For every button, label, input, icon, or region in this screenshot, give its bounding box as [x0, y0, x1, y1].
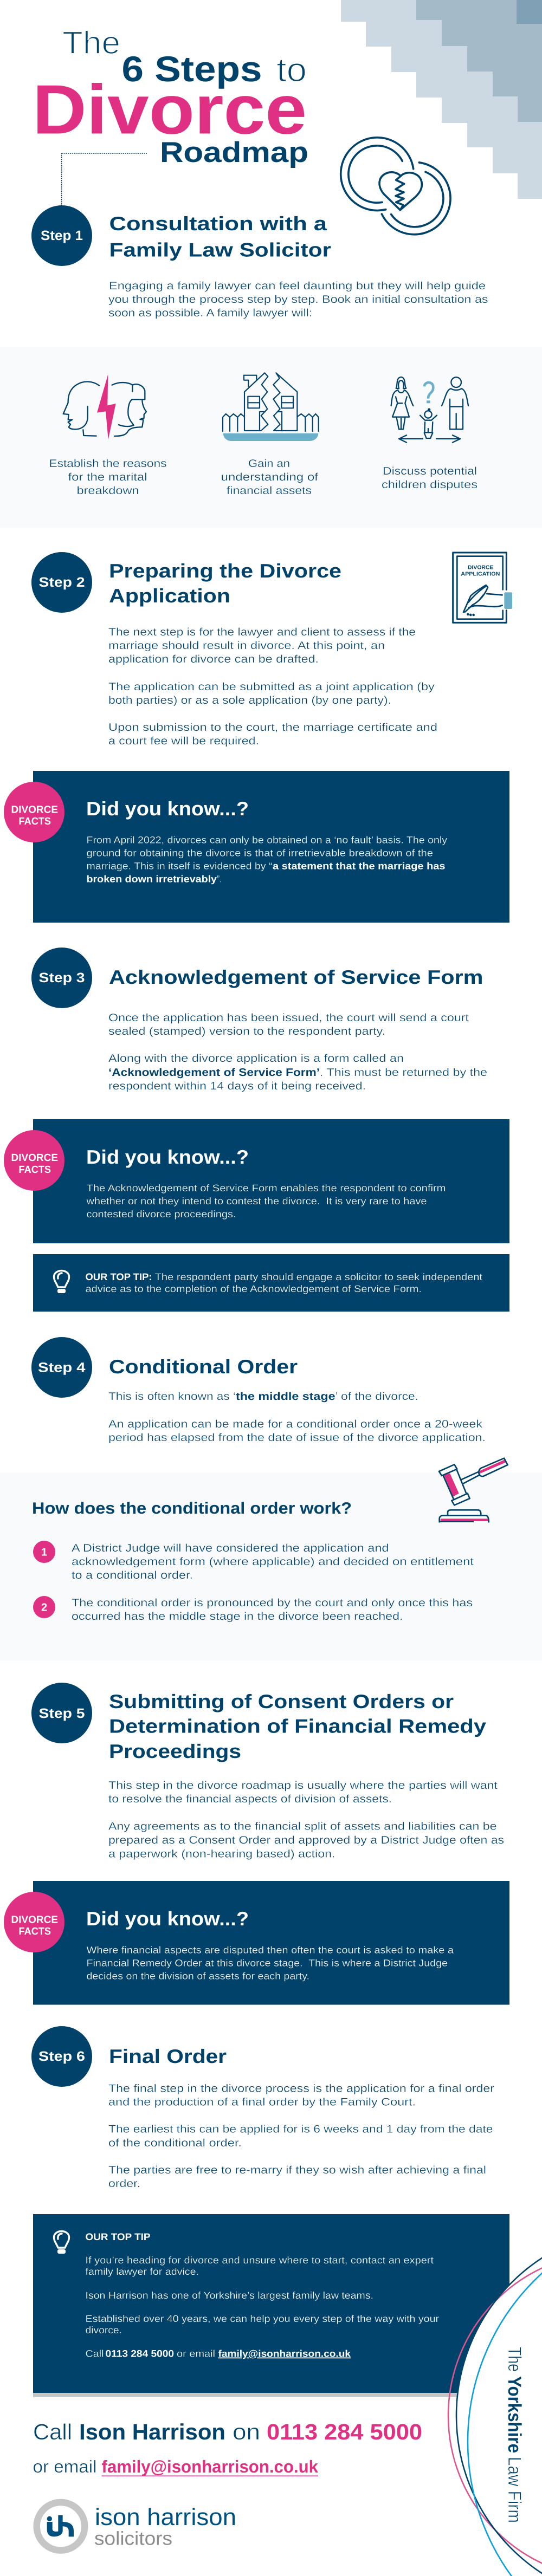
numbered item 2: The conditional order is pronounced by the court and only once this has: [72, 1597, 473, 1609]
step 1 text: soon as possible. A family lawyer will:: [108, 307, 312, 319]
icon: light bulb: [54, 1271, 69, 1293]
step 4 badge: [31, 1337, 92, 1398]
step 1 heading: Consultation with a: [109, 212, 327, 235]
tip text: [86, 2255, 439, 2359]
step 3 badge: Step 3: [39, 970, 85, 985]
badge: divorce facts: FACTS: [18, 816, 51, 827]
step 6 heading: Final Order: [109, 2045, 227, 2067]
step 1 heading: [109, 212, 331, 261]
caption: marital breakdown: breakdown: [77, 485, 139, 497]
step 6 badge: [31, 2026, 92, 2087]
fact text: The Acknowledgement of Service Form enables the respondent to confirm: [87, 1183, 446, 1193]
step 4 text: period has elapsed from the date of issue of the divorce application.: [108, 1432, 486, 1444]
step 2 text: [108, 626, 437, 747]
badge: divorce facts: DIVORCE: [11, 1915, 58, 1925]
step 4 text: An application can be made for a conditional order once a 20-week: [108, 1418, 483, 1430]
fact text: a statement that the marriage has: [273, 860, 446, 871]
step 5 heading: [109, 1690, 486, 1762]
icon: light bulb: [54, 2231, 69, 2254]
caption: marital breakdown: for the marital: [68, 471, 147, 483]
badge: divorce facts: [4, 1892, 64, 1952]
tip text: family@isonharrison.co.uk: [218, 2348, 351, 2359]
step 2 badge: Step 2: [39, 575, 85, 590]
call to action: phone: 0113 284 5000: [267, 2419, 422, 2444]
logo: ison harrison solicitors: [37, 2502, 236, 2551]
badge: divorce facts: DIVORCE: [11, 804, 58, 816]
dotted connector line: [62, 153, 147, 206]
icon: two heads with lightning: [63, 374, 146, 440]
caption: financial assets: financial assets: [227, 485, 312, 497]
step 3 text: [108, 1012, 487, 1092]
step 5 heading: Proceedings: [109, 1740, 241, 1762]
step 1 heading: Family Law Solicitor: [109, 238, 331, 261]
logo: ison harrison solicitors: solicitors: [94, 2528, 172, 2549]
logo: ison harrison solicitors: ison harrison: [95, 2504, 236, 2530]
icon: divorce application document: [453, 553, 512, 622]
step 3 text: sealed (stamped) version to the respondent party.: [108, 1026, 385, 1037]
caption: marital breakdown: Establish the reasons: [49, 458, 167, 470]
step 4 text: the middle stage: [236, 1391, 335, 1403]
step 1 badge: [31, 205, 92, 266]
step 3 heading: Acknowledgement of Service Form: [109, 966, 483, 988]
heading: did you know: Did you know...?: [86, 1146, 249, 1168]
step 2 text: both parties) or as a sole application (by one party).: [108, 695, 391, 706]
badge: divorce facts: [4, 1130, 64, 1191]
step 4 badge: Step 4: [38, 1360, 86, 1375]
call to action: email: family@isonharrison.co.uk: [102, 2457, 318, 2476]
fact text: [86, 1183, 446, 1219]
fact text: broken down irretrievably: [87, 873, 217, 884]
numbered item 1: [33, 1541, 474, 1581]
step 6 text: [108, 2082, 494, 2190]
step 3 text: Once the application has been issued, the court will send a court: [108, 1012, 469, 1024]
tip text: If you’re heading for divorce and unsure where to start, contact an expert: [86, 2255, 434, 2266]
fact text: ground for obtaining the divorce is that of irretrievable breakdown of the: [87, 847, 433, 858]
tip text: OUR TOP TIP:: [86, 1271, 152, 1282]
badge: divorce facts: [4, 782, 64, 842]
vertical strapline: [504, 2347, 525, 2523]
numbered item 2: [33, 1596, 473, 1623]
step 5 heading: Determination of Financial Remedy: [109, 1715, 486, 1737]
tip text: Ison Harrison has one of Yorkshire’s largest family law teams.: [86, 2290, 373, 2301]
step 5 text: [108, 1780, 504, 1860]
step 5 text: Any agreements as to the financial split of assets and liabilities can be: [108, 1820, 496, 1832]
step 6 text: The earliest this can be applied for is 6 weeks and 1 day from the date: [108, 2124, 493, 2136]
panel: divorce facts 1: [4, 771, 509, 923]
step 2 heading: Application: [109, 585, 230, 607]
fact text: [87, 834, 447, 884]
step 6 text: of the conditional order.: [108, 2137, 242, 2149]
fact text: Financial Remedy Order at this divorce stage. This is where a District Judge: [87, 1958, 448, 1969]
title: [33, 25, 308, 168]
caption: financial assets: [221, 458, 319, 497]
icon: split house: [223, 373, 319, 441]
icon: broken heart and rings: [341, 138, 450, 235]
icon: parents and child: [391, 377, 468, 443]
step 2 heading: Preparing the Divorce: [109, 560, 341, 582]
title: 6 Steps: [121, 49, 262, 89]
fact text: Where financial aspects are disputed then often the court is asked to make a: [87, 1945, 454, 1956]
numbered item 1: to a conditional order.: [72, 1569, 193, 1581]
panel: divorce facts 3: [4, 1881, 509, 2004]
step 3 badge: [31, 948, 92, 1008]
badge: divorce facts: FACTS: [18, 1926, 51, 1937]
caption: children disputes: Discuss potential: [383, 465, 477, 477]
step 3 text: Along with the divorce application is a form called an: [108, 1053, 404, 1065]
caption: children disputes: children disputes: [382, 479, 478, 491]
caption: financial assets: understanding of: [221, 471, 319, 483]
step 2 text: a court fee will be required.: [108, 735, 259, 747]
step 4 heading: Conditional Order: [109, 1355, 298, 1378]
title: The: [62, 25, 120, 61]
vertical strapline: Yorkshire: [504, 2376, 525, 2453]
tip text: family lawyer for advice.: [86, 2266, 199, 2277]
numbered item 1: A District Judge will have considered the application and: [72, 1542, 389, 1554]
step 6 text: The parties are free to re-marry if they so wish after achieving a final: [108, 2164, 486, 2176]
call to action: phone: on: [233, 2419, 260, 2444]
step 6 text: The final step in the divorce process is the application for a final order: [108, 2082, 494, 2094]
icon: divorce application document: APPLICATION: [461, 571, 500, 577]
step 2 text: marriage should result in divorce. At this point, an: [108, 640, 385, 652]
icon: divorce application document: DIVORCE: [468, 564, 493, 570]
badge: divorce facts: DIVORCE: [11, 1152, 58, 1164]
fact text: marriage. This in itself is evidenced by “: [87, 860, 272, 871]
step 6 text: order.: [108, 2178, 140, 2190]
tip text: divorce.: [86, 2325, 122, 2335]
step 5 text: prepared as a Consent Order and approved by a District Judge often as: [108, 1834, 504, 1846]
call to action: phone: Ison Harrison: [79, 2419, 225, 2444]
call to action: phone: Call: [33, 2419, 72, 2444]
step 2 text: The next step is for the lawyer and client to assess if the: [108, 626, 416, 638]
decorative circle arcs: [448, 2214, 542, 2576]
tip text: or email: [177, 2348, 215, 2359]
tip text: The respondent party should engage a solicitor to seek independent: [155, 1271, 482, 1282]
tip text: Call: [86, 2348, 104, 2359]
tip text: 0113 284 5000: [105, 2348, 174, 2359]
step 4 text: This is often known as ‘: [108, 1391, 236, 1403]
fact text: ”.: [217, 873, 222, 884]
step 5 text: a paperwork (non-hearing based) action.: [108, 1848, 335, 1860]
heading: did you know: Did you know...?: [86, 1907, 249, 1930]
step 3 text: respondent within 14 days of it being received.: [108, 1080, 366, 1092]
step 2 text: application for divorce can be drafted.: [108, 653, 319, 665]
tip text: Established over 40 years, we can help you every step of the way with your: [86, 2313, 439, 2324]
heading: how does the conditional order work: How does the conditional order work?: [32, 1500, 352, 1517]
fact text: whether or not they intend to contest the divorce. It is very rare to have: [86, 1196, 427, 1206]
step 5 heading: Submitting of Consent Orders or: [109, 1690, 454, 1712]
fact text: contested divorce proceedings.: [87, 1209, 236, 1219]
call to action: phone: [33, 2419, 422, 2444]
badge: divorce facts: FACTS: [18, 1164, 51, 1176]
tip heading: OUR TOP TIP: [86, 2231, 151, 2242]
step 5 badge: [31, 1683, 92, 1743]
tip text: [86, 1271, 482, 1294]
icon: gavel: [439, 1458, 508, 1522]
step 5 text: This step in the divorce roadmap is usually where the parties will want: [108, 1780, 498, 1792]
fact text: From April 2022, divorces can only be obtained on a ‘no fault’ basis. The only: [87, 834, 447, 845]
panel: top tip: [33, 1254, 509, 1312]
step 5 text: to resolve the financial aspects of division of assets.: [108, 1793, 392, 1805]
caption: children disputes: [382, 465, 478, 491]
step 4 text: ’ of the divorce.: [335, 1391, 418, 1403]
title: to: [276, 51, 307, 89]
fact text: decides on the division of assets for each party.: [87, 1971, 309, 1982]
panel: final top tip: [33, 2214, 542, 2576]
step 1 text: [108, 280, 488, 319]
numbered item 2: 2: [41, 1601, 47, 1613]
numbered item 1: 1: [41, 1546, 47, 1558]
step 6 badge: Step 6: [38, 2049, 85, 2064]
background stair pattern: [341, 0, 542, 199]
fact text: [87, 1945, 454, 1982]
numbered item 2: occurred has the middle stage in the divorce been reached.: [72, 1611, 403, 1623]
title: Roadmap: [160, 137, 308, 168]
step 2 heading: [109, 560, 341, 607]
step 1 text: Engaging a family lawyer can feel daunting but they will help guide: [109, 280, 486, 292]
step 2 text: The application can be submitted as a joint application (by: [108, 681, 435, 693]
step 2 text: Upon submission to the court, the marriage certificate and: [108, 722, 437, 734]
panel: what a family lawyer will do: [0, 347, 542, 528]
panel: how does the conditional order work: [0, 1458, 542, 1660]
step 1 text: you through the process step by step. Book an initial consultation as: [108, 294, 488, 306]
numbered item 1: acknowledgement form (where applicable) and decided on entitlement: [72, 1556, 474, 1568]
vertical strapline: The: [504, 2347, 525, 2372]
step 2 badge: [31, 552, 92, 613]
step 1 badge: Step 1: [41, 228, 83, 243]
step 4 text: [108, 1391, 486, 1444]
tip text: advice as to the completion of the Acknowledgement of Service Form.: [86, 1283, 422, 1294]
step 3 text: . This must be returned by the: [320, 1067, 487, 1079]
vertical strapline: Law Firm: [504, 2457, 525, 2523]
step 6 text: and the production of a final order by the Family Court.: [108, 2097, 416, 2108]
step 3 text: ‘Acknowledgement of Service Form’: [108, 1067, 320, 1079]
heading: did you know: Did you know...?: [86, 797, 249, 820]
step 5 badge: Step 5: [39, 1706, 85, 1721]
title: Divorce: [33, 70, 307, 148]
caption: marital breakdown: [49, 458, 167, 497]
call to action: email: or email: [33, 2457, 96, 2476]
panel: divorce facts 2: [4, 1119, 509, 1243]
caption: financial assets: Gain an: [248, 458, 290, 470]
